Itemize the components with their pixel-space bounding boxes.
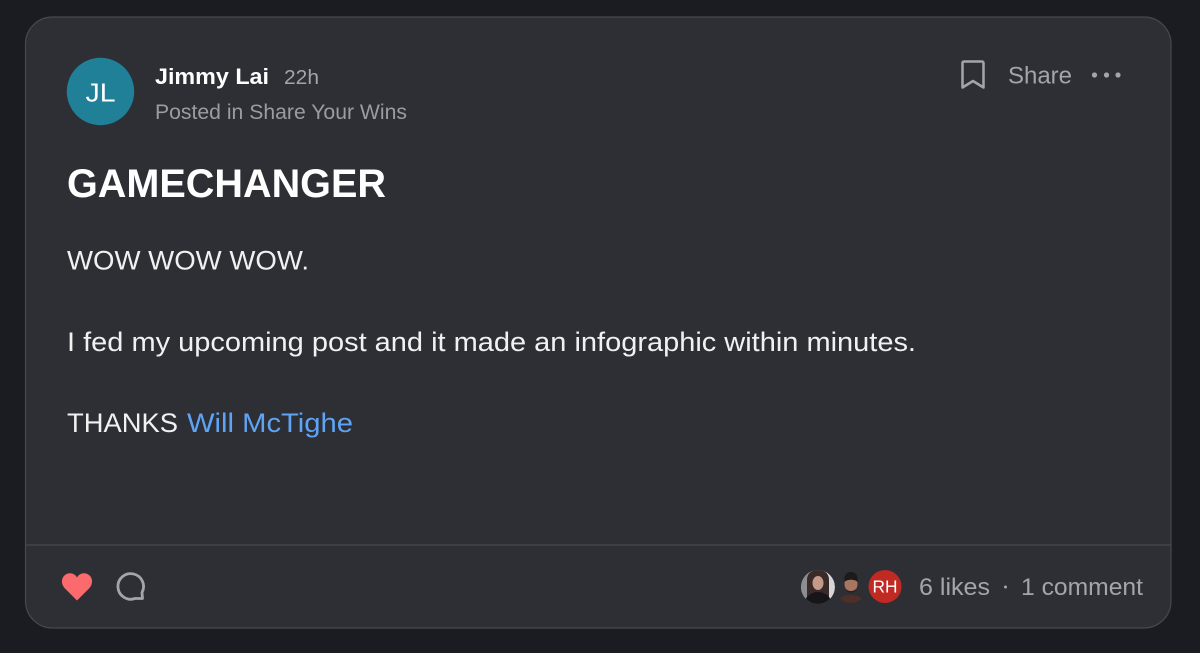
post body thanks: THANKS — [67, 408, 178, 438]
icon: liker avatar man — [840, 572, 862, 603]
separator dot — [1004, 586, 1007, 588]
icon: more options — [1092, 72, 1121, 78]
post category: Posted in Share Your Wins — [155, 101, 407, 124]
post body line 1: WOW WOW WOW. — [67, 246, 309, 276]
post title: GAMECHANGER — [67, 162, 386, 206]
icon: comment bubble — [118, 574, 144, 599]
post body line 2: I fed my upcoming post and it made an infographic within minutes. — [67, 327, 916, 357]
icon: heart — [62, 573, 92, 600]
icon: liker avatar RH: RH — [872, 576, 898, 596]
icon: author avatar: JL — [86, 80, 116, 108]
share label: Share — [1008, 62, 1072, 90]
mention link: Will McTighe — [187, 408, 353, 438]
post time: 22h — [284, 66, 319, 89]
icon: liker avatar woman — [801, 570, 835, 604]
likes count: 6 likes — [919, 574, 990, 601]
author name: Jimmy Lai — [155, 64, 269, 89]
icon: bookmark — [962, 62, 984, 88]
icon: author avatar — [67, 58, 134, 125]
comment count: 1 comment — [1021, 574, 1143, 601]
icon: liker avatar RH — [868, 570, 902, 603]
